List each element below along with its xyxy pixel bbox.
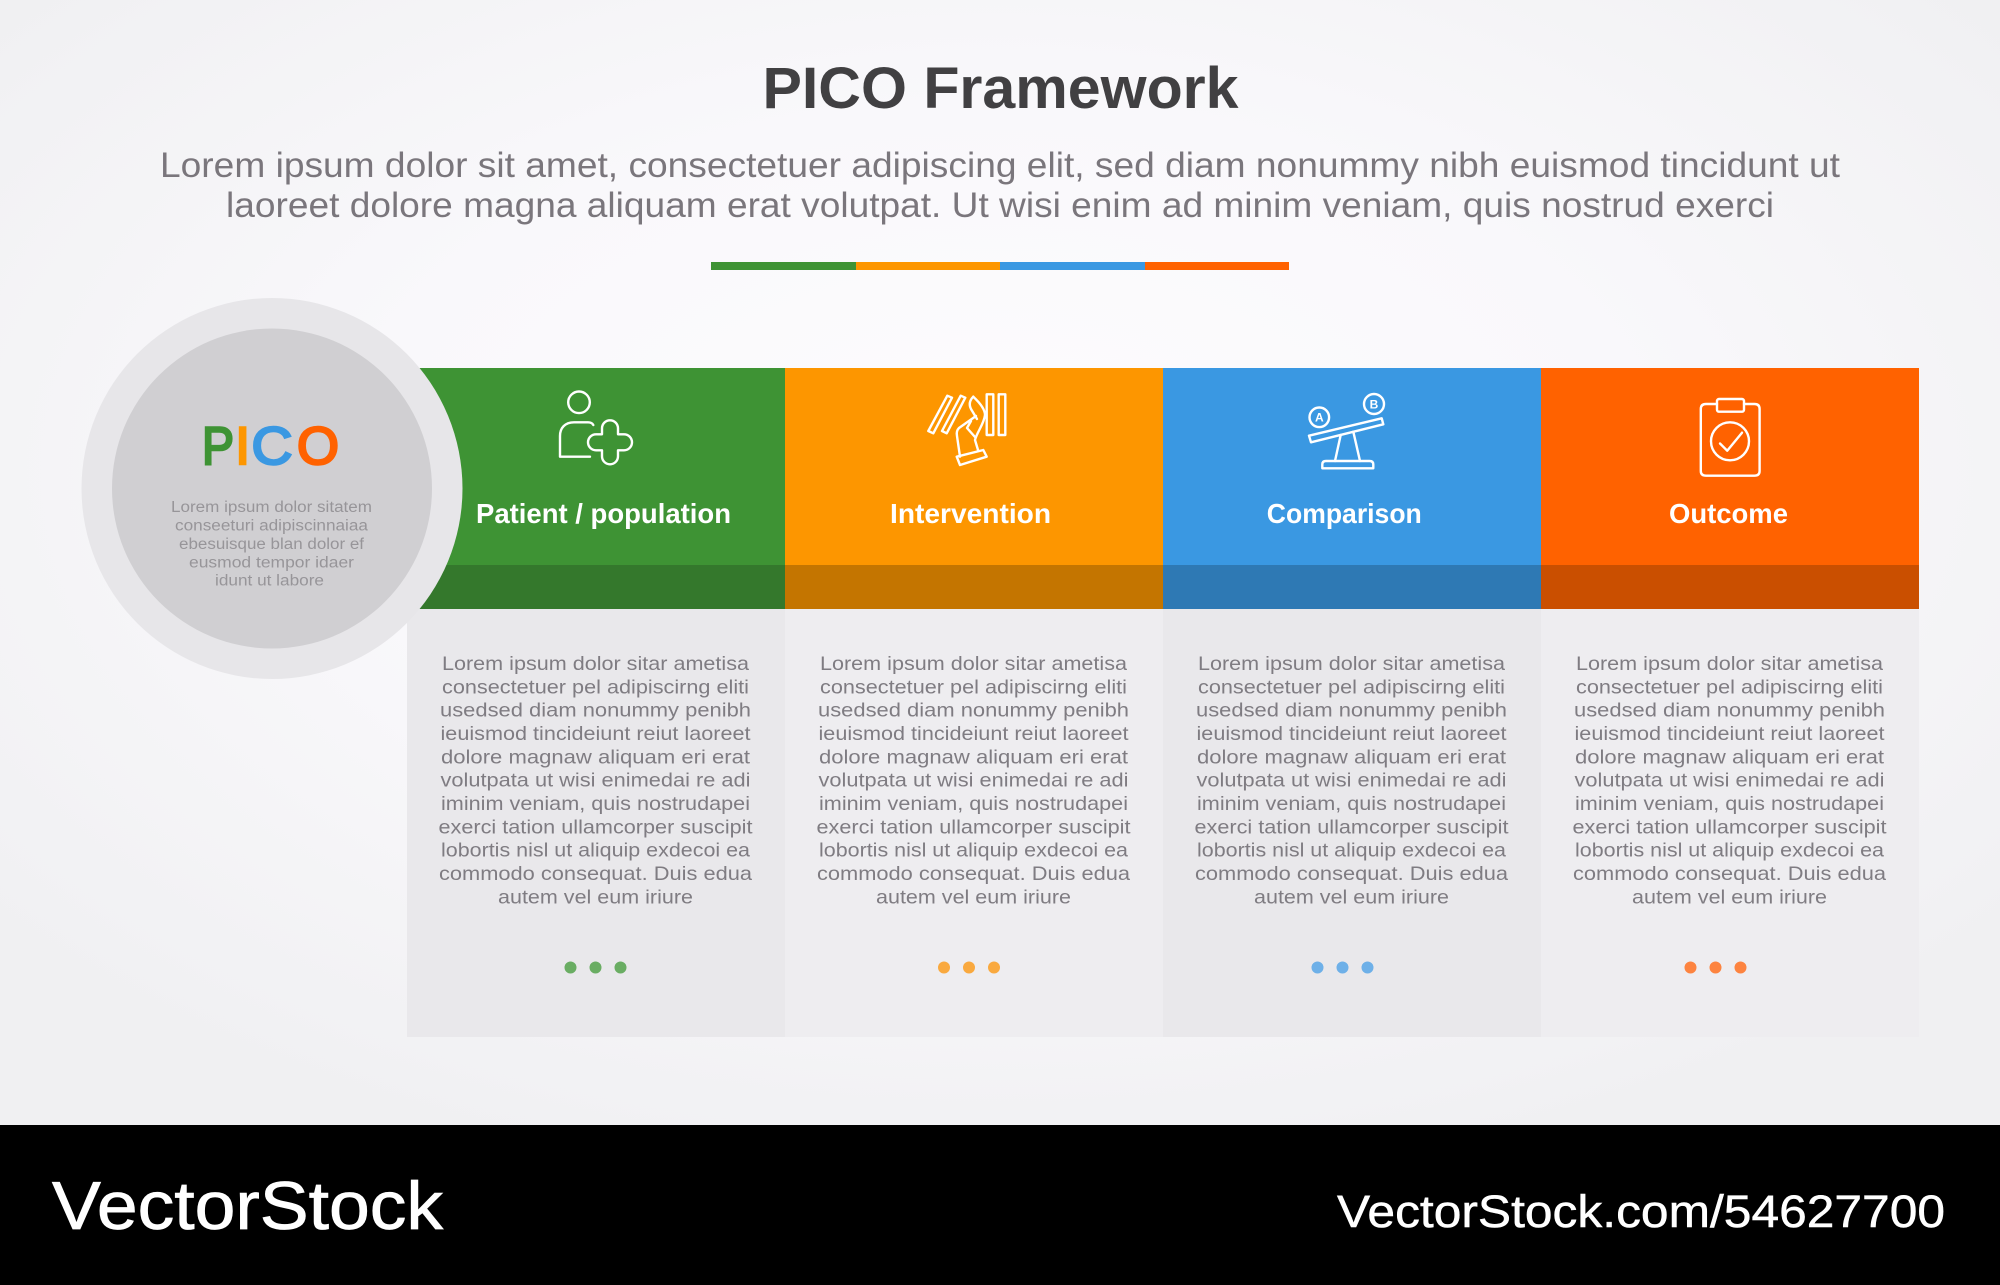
body background	[785, 609, 1163, 1037]
body text: exerci tation ullamcorper suscipit	[1572, 816, 1887, 838]
body text: exerci tation ullamcorper suscipit	[1194, 816, 1509, 838]
subtitle text: laoreet dolore magna aliquam erat volutpat. Ut wisi enim ad minim veniam, quis nostrud exerci	[226, 186, 1774, 225]
outer ring	[82, 298, 462, 679]
circle description text: eusmod tempor idaer	[189, 554, 354, 571]
body text: lobortis nisl ut aliquip exdecoi ea	[819, 840, 1128, 862]
circle description text: Lorem ipsum dolor sitatem	[171, 499, 372, 516]
body text: iminim veniam, quis nostrudapei	[1575, 793, 1884, 815]
body text: ieuismod tincideiunt reiut laoreet	[818, 723, 1129, 745]
body text: autem vel eum iriure	[1254, 886, 1449, 908]
panel: intervention column	[785, 368, 1163, 1037]
circle description text: idunt ut labore	[215, 573, 324, 590]
body text: exerci tation ullamcorper suscipit	[816, 816, 1131, 838]
body text: volutpata ut wisi enimedai re adi	[818, 770, 1128, 792]
heading: patient / population: Patient / population	[476, 498, 731, 529]
colour divider bar	[711, 262, 1289, 270]
PICO coloured logo: O	[297, 417, 339, 476]
PICO coloured logo	[202, 417, 339, 476]
three dots	[1684, 962, 1746, 974]
body text	[1194, 653, 1509, 908]
body text: autem vel eum iriure	[1632, 886, 1827, 908]
body text: consectetuer pel adipiscirng eliti	[1198, 676, 1505, 698]
body text: autem vel eum iriure	[498, 886, 693, 908]
header block	[1541, 368, 1919, 565]
body text: ieuismod tincideiunt reiut laoreet	[1574, 723, 1885, 745]
icon: seesaw A versus B	[1309, 394, 1384, 468]
body text: commodo consequat. Duis edua	[817, 863, 1130, 885]
PICO coloured logo: C	[252, 417, 292, 476]
subtitle text: Lorem ipsum dolor sit amet, consectetuer adipiscing elit, sed diam nonummy nibh euismod tincidunt ut	[160, 146, 1840, 185]
body text: ieuismod tincideiunt reiut laoreet	[440, 723, 751, 745]
body text: lobortis nisl ut aliquip exdecoi ea	[441, 840, 750, 862]
body background	[1541, 609, 1919, 1037]
header block	[1163, 368, 1541, 565]
body text: volutpata ut wisi enimedai re adi	[1574, 770, 1884, 792]
icon: patient with medical cross	[560, 392, 632, 464]
header shade band	[1541, 565, 1919, 609]
circle description text: conseeturi adipiscinnaiaa	[175, 518, 368, 534]
body text: commodo consequat. Duis edua	[439, 863, 752, 885]
heading: outcome: Outcome	[1669, 498, 1788, 529]
three dots	[1312, 962, 1374, 974]
heading: intervention: Intervention	[890, 498, 1051, 529]
body text: iminim veniam, quis nostrudapei	[1197, 793, 1506, 815]
circle description text: ebesuisque blan dolor ef	[179, 536, 365, 553]
body text: consectetuer pel adipiscirng eliti	[820, 676, 1127, 698]
subtitle text	[160, 146, 1840, 225]
icon: seesaw A versus B: A	[1315, 411, 1324, 425]
body text: lobortis nisl ut aliquip exdecoi ea	[1575, 840, 1884, 862]
body text: usedsed diam nonummy penibh	[440, 700, 751, 722]
header block	[785, 368, 1163, 565]
PICO coloured logo: I	[235, 417, 250, 476]
icon: hand and falling dominoes	[928, 394, 1005, 465]
body text: volutpata ut wisi enimedai re adi	[1196, 770, 1506, 792]
body text: Lorem ipsum dolor sitar ametisa	[1198, 653, 1505, 675]
body text: usedsed diam nonummy penibh	[818, 700, 1129, 722]
body text: usedsed diam nonummy penibh	[1574, 700, 1885, 722]
icon: clipboard with check	[1701, 399, 1760, 476]
body text: Lorem ipsum dolor sitar ametisa	[442, 653, 749, 675]
panel: patient / population column	[407, 368, 785, 1037]
header shade band	[1163, 565, 1541, 609]
three dots	[938, 962, 1000, 974]
title: PICO Framework	[762, 56, 1239, 121]
panel: PICO circle	[82, 298, 462, 679]
header block	[407, 368, 785, 565]
header shade band	[785, 565, 1163, 609]
body text: dolore magnaw aliquam eri erat	[1575, 746, 1885, 768]
body text: Lorem ipsum dolor sitar ametisa	[820, 653, 1127, 675]
footer url: VectorStock.com/54627700	[1337, 1186, 1945, 1237]
three dots	[564, 962, 626, 974]
body text: dolore magnaw aliquam eri erat	[1197, 746, 1507, 768]
inner circle	[112, 328, 432, 648]
body text	[438, 653, 753, 908]
panel: comparison column	[1163, 368, 1541, 1037]
body text: consectetuer pel adipiscirng eliti	[442, 676, 749, 698]
footer brand: VectorStock	[52, 1168, 444, 1244]
heading: comparison: Comparison	[1267, 498, 1422, 529]
body text: dolore magnaw aliquam eri erat	[819, 746, 1129, 768]
body text: lobortis nisl ut aliquip exdecoi ea	[1197, 840, 1506, 862]
body text: iminim veniam, quis nostrudapei	[819, 793, 1128, 815]
circle description text	[171, 499, 372, 590]
body text: autem vel eum iriure	[876, 886, 1071, 908]
body background	[407, 609, 785, 1037]
icon: seesaw A versus B: B	[1370, 397, 1379, 411]
panel: outcome column	[1541, 368, 1919, 1037]
body text: ieuismod tincideiunt reiut laoreet	[1196, 723, 1507, 745]
body text: consectetuer pel adipiscirng eliti	[1576, 676, 1883, 698]
body text: volutpata ut wisi enimedai re adi	[440, 770, 750, 792]
body text: commodo consequat. Duis edua	[1195, 863, 1508, 885]
footer bar	[0, 1125, 2000, 1285]
body text: dolore magnaw aliquam eri erat	[441, 746, 751, 768]
body text: iminim veniam, quis nostrudapei	[441, 793, 750, 815]
body text: Lorem ipsum dolor sitar ametisa	[1576, 653, 1883, 675]
body background	[1163, 609, 1541, 1037]
body text	[816, 653, 1131, 908]
body text: exerci tation ullamcorper suscipit	[438, 816, 753, 838]
body text: commodo consequat. Duis edua	[1573, 863, 1886, 885]
body text: usedsed diam nonummy penibh	[1196, 700, 1507, 722]
body text	[1572, 653, 1887, 908]
header shade band	[407, 565, 785, 609]
PICO coloured logo: P	[202, 417, 234, 476]
